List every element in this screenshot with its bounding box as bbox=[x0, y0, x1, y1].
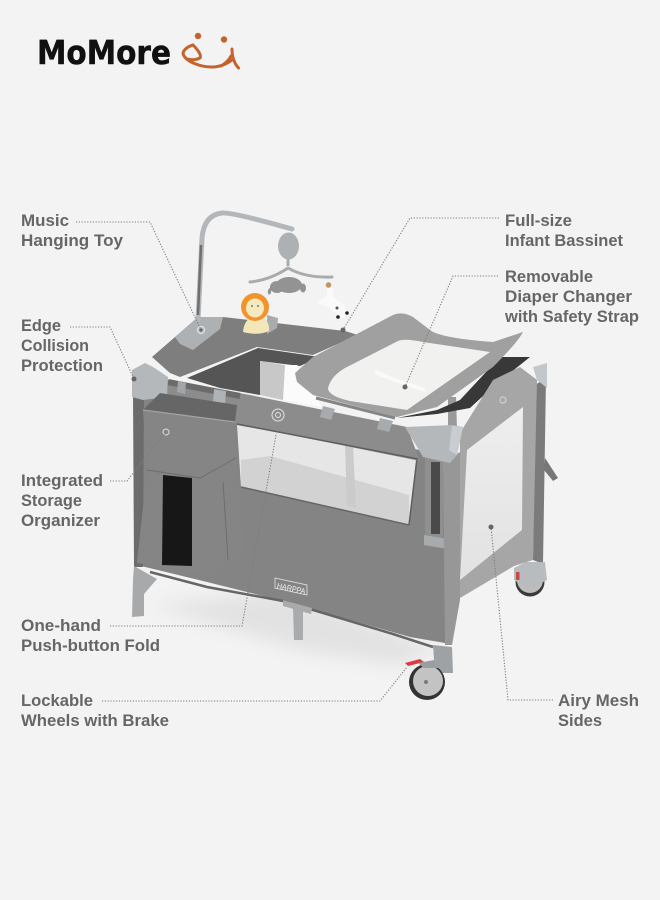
mobile arm bbox=[198, 213, 292, 320]
cot: right rear wheel bbox=[514, 562, 547, 596]
callout: Lockable Wheels with Brake: Wheels with Brake bbox=[21, 711, 169, 730]
cot: right mesh panel bbox=[460, 407, 523, 580]
cot: top front rail bbox=[167, 380, 420, 461]
cot: rear right post bbox=[448, 397, 457, 428]
callout: Airy Mesh Sides: Sides bbox=[558, 711, 602, 730]
cot: strap on far side bbox=[544, 458, 558, 481]
cot: rear top wall bbox=[152, 317, 358, 377]
cot: music hanging toy mobile bbox=[198, 213, 349, 334]
callout: Full-size Infant Bassinet bbox=[340, 211, 623, 332]
callout: Music Hanging Toy: Hanging Toy bbox=[21, 231, 124, 250]
cot: front left leg bbox=[132, 566, 157, 617]
cot: HARPPA label: HARPPA bbox=[276, 581, 307, 596]
callout: Removable Diaper Changer with Safety Strap: Diaper Changer bbox=[505, 287, 632, 306]
callout: Integrated Storage Organizer: Storage bbox=[21, 491, 82, 510]
brake pedal bbox=[405, 659, 424, 666]
callout: Airy Mesh Sides: Airy Mesh bbox=[558, 691, 639, 710]
giraffe toy bbox=[318, 282, 349, 319]
lion toy bbox=[241, 293, 269, 334]
cot: inner mattress view bbox=[283, 365, 322, 407]
callout: Music Hanging Toy: Music bbox=[21, 211, 69, 230]
elephant toy bbox=[269, 277, 306, 294]
callout: Edge Collision Protection: Collision bbox=[21, 336, 89, 355]
logo: MoMore: MoMore bbox=[37, 33, 171, 72]
callout: Music Hanging Toy bbox=[21, 211, 202, 332]
cot: slider post and corner bbox=[405, 425, 463, 645]
callout: Lockable Wheels with Brake: Lockable bbox=[21, 691, 93, 710]
cot: front wheel with brake bbox=[405, 645, 453, 700]
cot: mobile base plate bbox=[175, 317, 223, 350]
cot: toy bracket clip bbox=[267, 315, 278, 334]
callout: Full-size Infant Bassinet: Full-size bbox=[505, 211, 572, 230]
cot: front mesh window bbox=[237, 425, 417, 525]
changer white pad bbox=[328, 340, 490, 410]
cot: far corner cap bbox=[533, 363, 547, 388]
callout: Integrated Storage Organizer: Integrated bbox=[21, 471, 103, 490]
underside bbox=[397, 357, 530, 418]
cot: inner rear wall bbox=[187, 348, 320, 395]
callout: Integrated Storage Organizer: Organizer bbox=[21, 511, 100, 530]
cot: diaper changer bbox=[295, 313, 530, 432]
cot: storage organizer bbox=[137, 393, 245, 577]
callout: Airy Mesh Sides bbox=[488, 524, 639, 730]
callout: Full-size Infant Bassinet: Infant Bassinet bbox=[505, 231, 623, 250]
cot: bottom frame rail bbox=[150, 572, 433, 647]
safety strap bbox=[375, 372, 425, 390]
callout: Edge Collision Protection: Edge bbox=[21, 316, 61, 335]
cot: far right post bbox=[533, 378, 546, 564]
callout: Edge Collision Protection: Protection bbox=[21, 356, 103, 375]
cot: left corner bracket bbox=[132, 363, 168, 400]
callout: Removable Diaper Changer with Safety Strap bbox=[402, 267, 639, 390]
callout: Lockable Wheels with Brake bbox=[21, 667, 407, 730]
callout: Integrated Storage Organizer bbox=[21, 432, 166, 530]
changer clips bbox=[316, 398, 395, 418]
callout: One-hand Push-button Fold: One-hand bbox=[21, 616, 101, 635]
cot: right side fabric bbox=[460, 367, 537, 598]
cot: centre leg bbox=[283, 600, 312, 640]
callout: Removable Diaper Changer with Safety Strap: Removable bbox=[505, 267, 593, 286]
mobile hanger bbox=[250, 268, 332, 282]
callout: Edge Collision Protection bbox=[21, 316, 136, 382]
floor shadows bbox=[150, 590, 440, 665]
cot: front left post bbox=[133, 392, 144, 567]
callout: One-hand Push-button Fold bbox=[21, 435, 276, 655]
callout: Removable Diaper Changer with Safety Strap: with Safety Strap bbox=[504, 307, 639, 326]
music box bbox=[278, 232, 299, 260]
cot: front lower fabric panel bbox=[137, 395, 445, 643]
callout: One-hand Push-button Fold: Push-button Fold bbox=[21, 636, 160, 655]
